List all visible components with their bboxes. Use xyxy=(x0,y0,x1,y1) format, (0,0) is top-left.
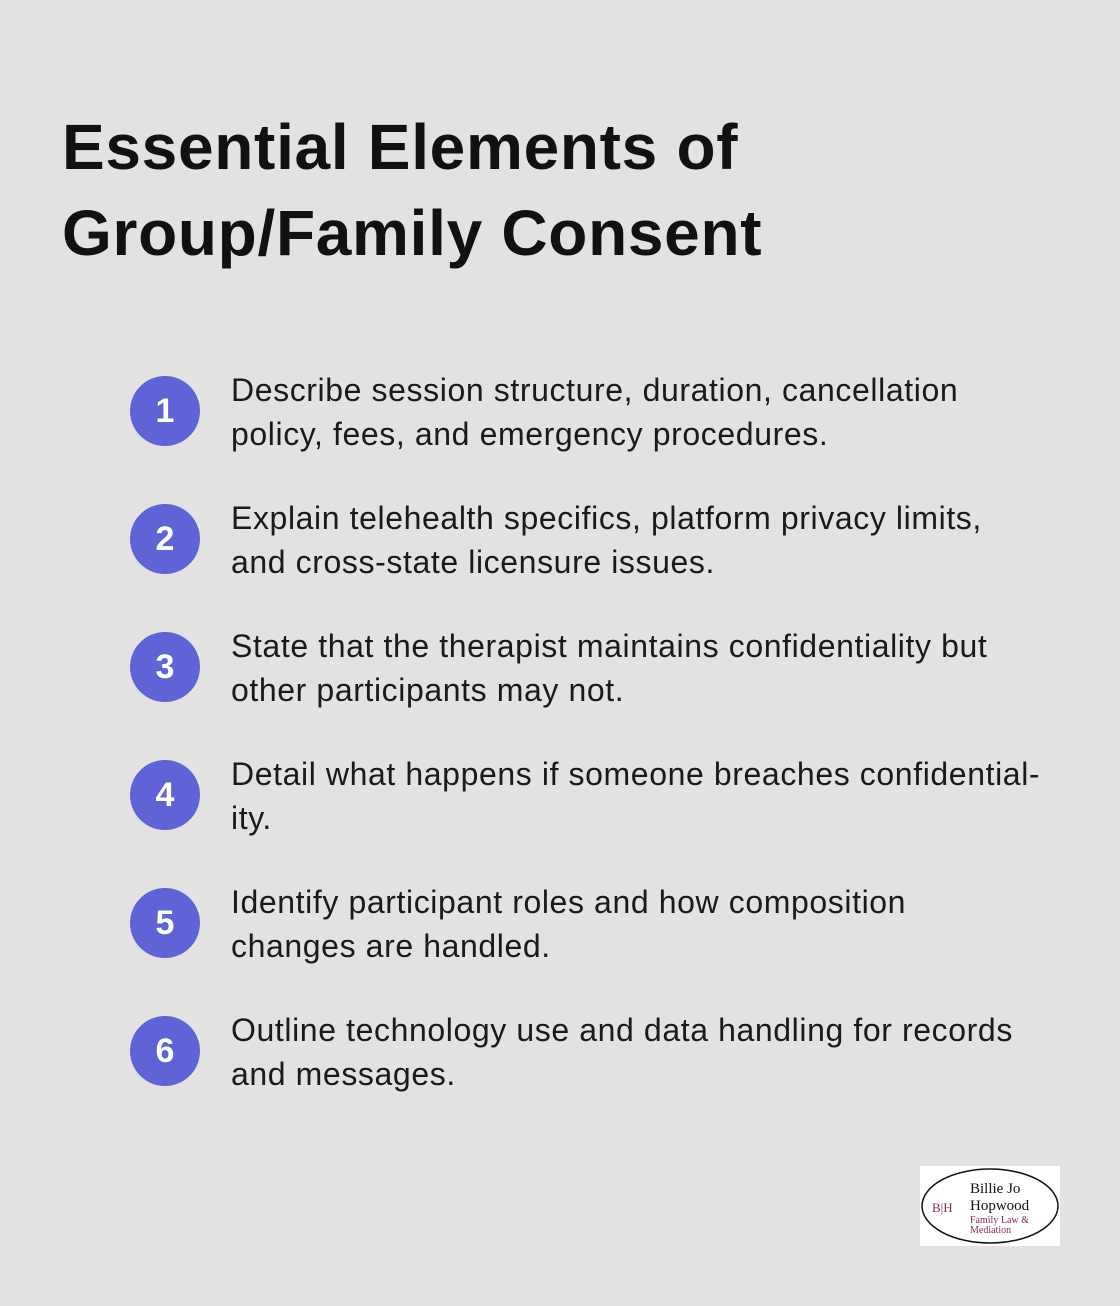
title xyxy=(62,111,762,269)
item 4 xyxy=(130,756,1040,836)
item 1: policy, fees, and emergency procedures. xyxy=(231,416,828,452)
item 4: ity. xyxy=(231,800,272,836)
item 3 xyxy=(130,628,987,708)
item 2: 2 xyxy=(156,520,174,558)
item 1: Describe session structure, duration, cancellation xyxy=(231,372,958,408)
item 6: 6 xyxy=(156,1032,174,1070)
title: Group/Family Consent xyxy=(62,197,762,269)
item 5: 5 xyxy=(156,904,174,942)
logo xyxy=(920,1166,1060,1246)
logo: Family Law & xyxy=(970,1215,1029,1226)
item 6: and messages. xyxy=(231,1056,456,1092)
item 3: 3 xyxy=(156,648,174,686)
item 2: and cross-state licensure issues. xyxy=(231,544,715,580)
item 6: Outline technology use and data handling for records xyxy=(231,1012,1013,1048)
item 3: State that the therapist maintains confidentiality but xyxy=(231,628,987,664)
item 1: 1 xyxy=(156,392,174,430)
item 4: 4 xyxy=(156,776,174,814)
item 2: Explain telehealth specifics, platform privacy limits, xyxy=(231,500,982,536)
item 5: Identify participant roles and how composition xyxy=(231,884,906,920)
item 2 xyxy=(130,500,982,580)
logo: Hopwood xyxy=(970,1198,1030,1214)
item 1 xyxy=(130,372,958,452)
title: Essential Elements of xyxy=(62,111,738,183)
logo: Billie Jo xyxy=(970,1181,1020,1197)
item 3: other participants may not. xyxy=(231,672,624,708)
logo: Mediation xyxy=(970,1225,1011,1236)
item 6 xyxy=(130,1012,1013,1092)
item 5: changes are handled. xyxy=(231,928,551,964)
item 4: Detail what happens if someone breaches confidential- xyxy=(231,756,1040,792)
logo: B|H xyxy=(932,1200,953,1215)
item 5 xyxy=(130,884,906,964)
